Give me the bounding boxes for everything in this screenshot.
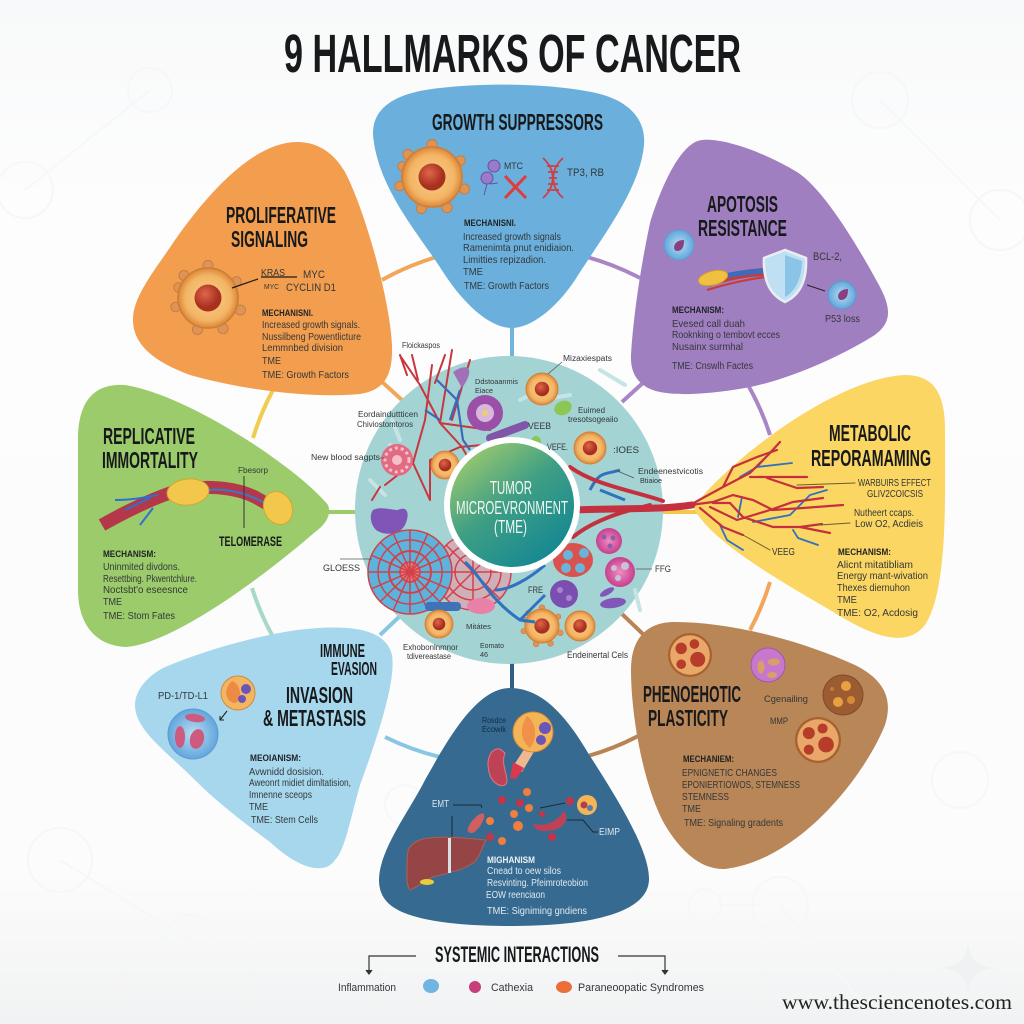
TME labels: tdivereastase bbox=[407, 652, 451, 661]
heading: GROWTH SUPPRESSORS bbox=[432, 109, 603, 135]
mechanism lines: Limitties repizadion. bbox=[463, 254, 546, 266]
panel: immune evasion and invasion bbox=[135, 628, 393, 868]
faint texture bbox=[370, 370, 640, 610]
TME labels: Eiace bbox=[475, 386, 493, 395]
TME labels: VEEB bbox=[528, 421, 551, 431]
core disc bbox=[450, 443, 574, 567]
legend icon: orange bbox=[556, 981, 572, 993]
icon: cell bbox=[664, 230, 694, 260]
icon: orange cell with vessel bbox=[574, 432, 606, 464]
heading: APOTOSIS bbox=[707, 191, 778, 217]
legend icon: pink bbox=[469, 981, 481, 993]
TME labels: Mizaxiespats bbox=[563, 354, 612, 363]
legend: cathexia: Cathexia bbox=[491, 982, 534, 994]
mechanism lines: EOW reenciaon bbox=[486, 889, 545, 901]
labels: EMT bbox=[432, 799, 449, 810]
icon: red cell with blue vesicles bbox=[553, 543, 593, 577]
icon: blue vessels bbox=[425, 380, 470, 450]
mechanism lines: TME: Cnswlh Factes bbox=[672, 360, 753, 372]
icon: cell bbox=[395, 140, 470, 214]
heading: REPLICATIVE bbox=[103, 423, 195, 449]
mechanism heading: MECHANISNI. bbox=[262, 308, 313, 319]
icon: vessel with telomere bbox=[102, 476, 298, 529]
icon: red cross bbox=[505, 176, 526, 198]
label: Fbesorp bbox=[238, 465, 268, 475]
mechanism lines: TME bbox=[463, 266, 483, 278]
labels: WARBUIRS EFFECT bbox=[858, 478, 931, 489]
callout lines bbox=[452, 803, 598, 838]
labels: GLIV2COICSIS bbox=[867, 489, 923, 500]
mechanism lines: TME: Signiming gndiens bbox=[487, 905, 587, 917]
TME labels: 46 bbox=[480, 650, 488, 659]
panel shape bbox=[693, 375, 945, 638]
mechanism lines: STEMNESS bbox=[682, 791, 729, 803]
icon: tumour cell bbox=[510, 712, 553, 779]
mechanism lines: TME: O2, Acdosig bbox=[837, 607, 918, 619]
label: TP3, RB bbox=[567, 167, 604, 179]
panel: invasion and metastasis bbox=[379, 688, 649, 926]
labels bbox=[764, 694, 808, 727]
mechanism lines: TME bbox=[837, 594, 857, 606]
icon: cell bbox=[668, 633, 712, 677]
icon: green bodies bbox=[531, 398, 574, 448]
heading: PROLIFERATIVE bbox=[226, 202, 336, 228]
icon: cell bbox=[828, 281, 856, 309]
gene labels: MYC bbox=[303, 269, 325, 281]
mechanism lines: TME: Growth Factors bbox=[464, 280, 549, 292]
TME labels: Endeenestvicotis bbox=[638, 467, 703, 476]
labels bbox=[432, 799, 620, 838]
panel: replicative immortality bbox=[78, 385, 329, 647]
panel: growth suppressors bbox=[373, 85, 644, 328]
mechanism lines: Nussilbeng Powentlicture bbox=[262, 331, 361, 343]
mechanism lines: Avwnidd dosision. bbox=[249, 766, 324, 778]
icon: red main vessel bbox=[570, 467, 692, 537]
mechanism lines bbox=[103, 561, 197, 622]
heading line 2: REPORAMAMING bbox=[811, 445, 931, 471]
icon: orange cell bbox=[565, 611, 595, 641]
mechanism lines: Uninmited divdons. bbox=[103, 561, 180, 573]
disc bbox=[355, 356, 663, 664]
label bbox=[482, 716, 507, 734]
mechanism lines: Resvinting. Pfeimroteobion bbox=[487, 877, 588, 889]
mechanism lines: Increased growth signals. bbox=[262, 319, 360, 331]
mechanism lines bbox=[262, 319, 361, 381]
TME labels: Chiviostomtoros bbox=[357, 420, 413, 429]
label: VEEG bbox=[772, 547, 795, 558]
mechanism lines: TME bbox=[249, 801, 268, 813]
panel: phenotypic plasticity bbox=[631, 622, 888, 869]
mechanism lines: TME: Stem Cells bbox=[251, 814, 318, 826]
mechanism lines: TME bbox=[262, 355, 281, 367]
panel: apoptosis resistance bbox=[631, 140, 888, 394]
mechanism lines: Aweonrt midiet dimltatision, bbox=[249, 777, 351, 789]
mechanism lines bbox=[682, 767, 800, 829]
TME labels: Exhobonlnmnor bbox=[403, 643, 458, 652]
labels bbox=[854, 478, 931, 530]
icon: lower cells bbox=[425, 598, 495, 614]
legend icon: blue bbox=[423, 979, 439, 993]
label: P53 loss bbox=[825, 313, 860, 325]
icon: orange cell bbox=[526, 373, 558, 405]
legend: inflammation: Inflammation bbox=[338, 982, 396, 994]
mechanism lines: Noctsbt'o eseesnce bbox=[103, 584, 188, 596]
icon: red network spheres bbox=[368, 530, 511, 614]
core text: (TME) bbox=[494, 517, 527, 537]
mechanism lines: Lemmnbed division bbox=[262, 342, 343, 354]
core text: MICROEVRONMENT bbox=[456, 498, 568, 518]
mechanism heading: MECHANISM: bbox=[103, 549, 156, 560]
heading: systemic interactions: SYSTEMIC INTERACTIONS bbox=[435, 942, 599, 967]
mechanism lines: Energy mant-wivation bbox=[837, 570, 928, 582]
labels: MMP bbox=[770, 716, 788, 727]
icon: dark cell bbox=[823, 675, 863, 715]
TME labels: Mitátes bbox=[466, 622, 491, 631]
mechanism lines: Imnenne sceops bbox=[249, 789, 312, 801]
heading: IMMUNE bbox=[320, 641, 365, 661]
label: Ecowik bbox=[482, 725, 507, 734]
gene labels: CYCLIN D1 bbox=[286, 282, 336, 294]
heading line 2: SIGNALING bbox=[231, 226, 308, 252]
mechanism lines: Nusainx surmhal bbox=[672, 341, 743, 353]
mechanism lines: Ramenimta pnut enidiaion. bbox=[463, 242, 574, 254]
website: www.thesciencenotes.com bbox=[782, 990, 1012, 1014]
icon: vessels in yellow panel bbox=[690, 442, 855, 550]
TME labels: Floickaspos bbox=[402, 341, 440, 350]
panel shape bbox=[373, 85, 644, 328]
labels: EIMP bbox=[599, 827, 620, 838]
labels: Low O2, Acdieis bbox=[855, 519, 923, 530]
heading: METABOLIC bbox=[829, 420, 911, 446]
icon: tumour cell bbox=[221, 676, 255, 710]
TME labels: GLOESS bbox=[323, 563, 360, 574]
TME labels: New blood sagpts bbox=[311, 452, 380, 462]
mechanism lines bbox=[463, 231, 574, 292]
mechanism lines: Alicnt mitatibliam bbox=[837, 559, 913, 571]
icon: mitochondrion and vessel bbox=[697, 268, 765, 290]
mechanism heading: MEOIANISM: bbox=[250, 753, 301, 764]
icon: watermark star bbox=[942, 944, 994, 992]
mechanism lines bbox=[486, 865, 588, 917]
icon: orange cell bbox=[521, 605, 563, 647]
panel shape bbox=[379, 688, 649, 926]
icon: MYC protein bbox=[481, 160, 500, 195]
panel: metabolic reprogramming bbox=[693, 375, 945, 638]
mechanism heading: MECHANISM: bbox=[672, 305, 724, 316]
mechanism heading: MECHANISM: bbox=[838, 547, 891, 558]
label: TELOMERASE bbox=[219, 533, 282, 549]
TME labels: Eordainduttticen bbox=[358, 410, 418, 419]
TME labels: Euimed bbox=[578, 406, 605, 415]
leader lines bbox=[340, 362, 652, 569]
TME labels: :IOES bbox=[613, 445, 639, 455]
icon: purple cell bbox=[453, 367, 525, 438]
panel shape bbox=[135, 628, 393, 868]
icon: purple cells bbox=[550, 580, 627, 610]
icon: orange cell bbox=[431, 451, 459, 479]
mechanism lines: Cnead to oew silos bbox=[487, 865, 561, 877]
icon: cell bbox=[171, 260, 246, 335]
panel shape bbox=[631, 140, 888, 394]
mechanism lines: TME bbox=[682, 803, 701, 815]
tumor microenvironment circle bbox=[311, 341, 855, 664]
mechanism lines: Thexes diernuhon bbox=[837, 582, 910, 594]
TME labels: FFG bbox=[655, 564, 671, 575]
icon: cell bbox=[795, 717, 841, 763]
icon: shield bbox=[764, 250, 806, 302]
arrow: left bracket bbox=[366, 956, 416, 974]
legend: paraneoplastic: Paraneoopatic Syndromes bbox=[578, 982, 704, 994]
mechanism lines: TME: Signaling gradents bbox=[684, 817, 783, 829]
labels: Cgenailing bbox=[764, 694, 808, 705]
mechanism lines bbox=[837, 559, 928, 619]
panel shape bbox=[631, 622, 888, 869]
icon: small tumour cell bbox=[577, 795, 597, 815]
labels: Nutheert ccaps. bbox=[854, 508, 914, 519]
heading line 2: PLASTICITY bbox=[648, 705, 728, 731]
mechanism lines: Increased growth signals bbox=[463, 231, 561, 243]
mechanism lines: TME: Growth Factors bbox=[262, 369, 349, 381]
TME labels: tresotsogeaiio bbox=[568, 415, 619, 424]
label: PD-1/TD-L1 bbox=[158, 690, 208, 702]
mechanism lines: Resettbing. Pkwentchlure. bbox=[103, 573, 197, 585]
icon: orange cell bbox=[425, 610, 453, 638]
icon: blue vessel bbox=[465, 470, 625, 622]
mechanism lines bbox=[249, 766, 351, 826]
heading line 3: INVASION bbox=[286, 682, 353, 708]
heading line 2: RESISTANCE bbox=[698, 215, 787, 241]
TME labels: Ddstoaanmis bbox=[475, 377, 518, 386]
title: 9 HALLMARKS OF CANCER bbox=[284, 24, 741, 84]
mechanism text: MECHANISNI. bbox=[464, 218, 516, 229]
heading: PHENOEHOTIC bbox=[643, 681, 741, 707]
mechanism lines: EPNIGNETIC CHANGES bbox=[682, 767, 777, 779]
panel: proliferative signaling bbox=[133, 142, 392, 395]
icon: liver bbox=[407, 837, 486, 890]
label: BCL-2, bbox=[813, 251, 842, 263]
panel shape bbox=[133, 142, 392, 395]
TME labels: FRE bbox=[528, 585, 543, 595]
connector ring bbox=[252, 256, 770, 757]
icon: pink cells bbox=[596, 528, 635, 587]
core ring bbox=[444, 437, 580, 573]
mechanism lines: Rooknking o tembovt ecces bbox=[672, 329, 780, 341]
icon: purple cell bbox=[751, 648, 785, 682]
TME labels: Endeinertal Cels bbox=[567, 650, 628, 660]
core text bbox=[456, 478, 568, 537]
TME labels bbox=[311, 341, 703, 661]
icon: red cell bbox=[488, 749, 507, 786]
mechanism heading: MECHANIEM: bbox=[683, 754, 734, 765]
panel shape bbox=[78, 385, 329, 647]
gene labels: KRAS bbox=[261, 268, 285, 279]
heading line 2: IMMORTALITY bbox=[102, 447, 198, 473]
mechanism heading: MIGHANISM bbox=[487, 855, 535, 866]
mechanism lines bbox=[672, 318, 780, 372]
icon: purple bilobed cell bbox=[371, 508, 408, 534]
TME labels: Eomato bbox=[480, 641, 504, 650]
icon: immune cell bbox=[168, 709, 218, 759]
arrow: right bracket bbox=[618, 956, 668, 974]
TME labels: Btiaioe bbox=[640, 476, 662, 485]
heading line 4: & METASTASIS bbox=[263, 705, 366, 731]
arrow bbox=[232, 277, 297, 288]
leader line bbox=[807, 285, 825, 291]
label: Rosdce bbox=[482, 716, 506, 725]
core text: TUMOR bbox=[490, 478, 532, 498]
gene labels bbox=[261, 268, 336, 294]
gene labels: MYC bbox=[264, 282, 280, 291]
mechanism lines: EPONIERTIOWOS, STEMNESS bbox=[682, 779, 800, 791]
icon: circulating cells bbox=[468, 788, 574, 845]
icon: pink spiky cell bbox=[381, 444, 413, 476]
icon: DNA helix bbox=[543, 158, 563, 198]
mechanism lines: TME: Stom Fates bbox=[103, 610, 175, 622]
mechanism lines: TME bbox=[103, 596, 122, 608]
TME labels: VEFE. bbox=[547, 442, 568, 452]
icon: red vascular tree bbox=[372, 350, 505, 500]
mechanism lines: Evesed call duah bbox=[672, 318, 745, 330]
heading line 2: EVASION bbox=[331, 659, 377, 679]
label: MTC bbox=[504, 161, 523, 172]
arrow bbox=[220, 711, 227, 720]
